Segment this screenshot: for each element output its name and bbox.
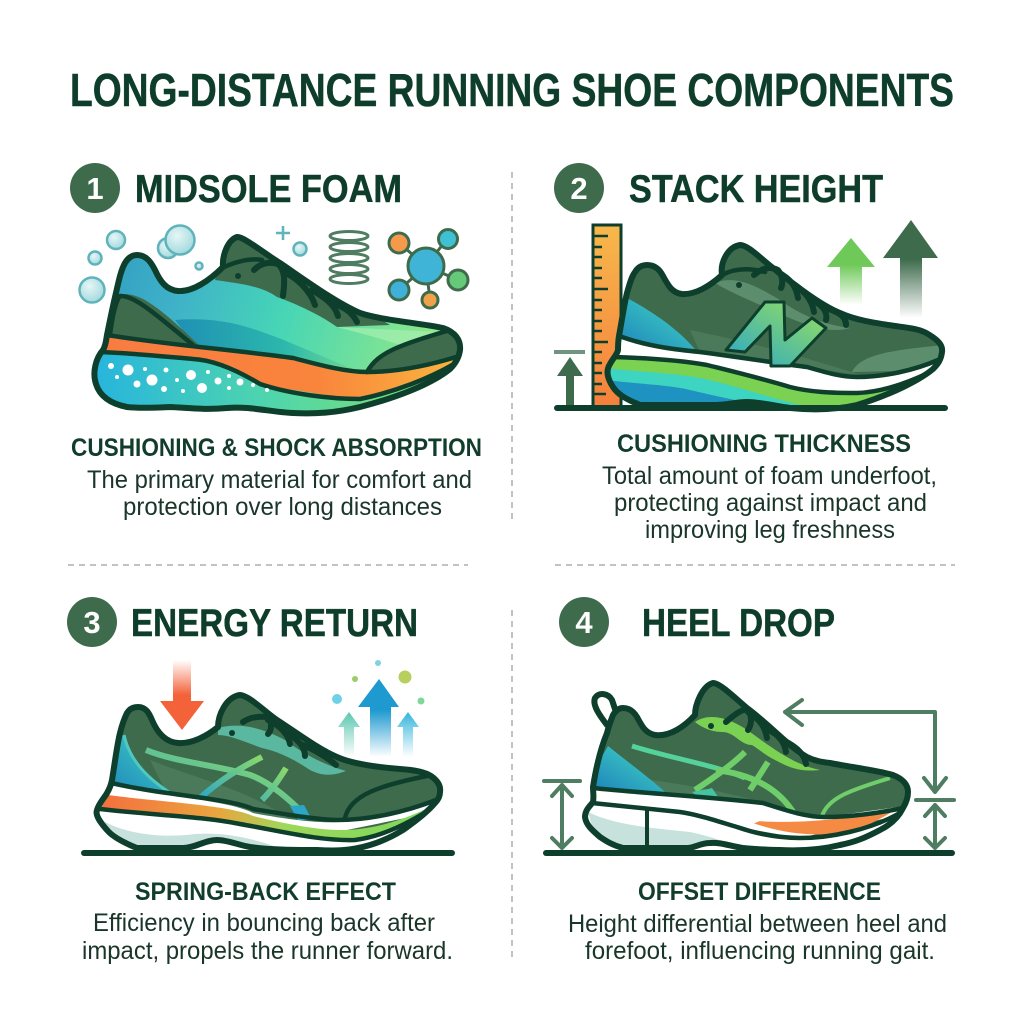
baseline bbox=[81, 850, 455, 856]
description: heel drop: Height differential between heel and bbox=[568, 910, 947, 938]
number badge 3 bbox=[67, 597, 117, 647]
logo: N mark bbox=[726, 302, 826, 366]
number badge 4: 4 bbox=[575, 605, 593, 640]
icon: small height arrow bbox=[554, 350, 585, 405]
icon: green up arrow bbox=[827, 238, 875, 305]
shoe: heel drop bbox=[580, 680, 915, 855]
shoe: stack height bbox=[600, 240, 950, 415]
number badge 3: 3 bbox=[83, 605, 101, 640]
shoe: midsole foam bbox=[90, 230, 470, 420]
description: stack height: protecting against impact and bbox=[614, 489, 927, 517]
subheading: offset difference: OFFSET DIFFERENCE bbox=[638, 878, 881, 906]
heading: stack height: STACK HEIGHT bbox=[629, 168, 883, 211]
description: heel drop bbox=[568, 910, 947, 965]
panel: stack height bbox=[554, 163, 950, 544]
description: midsole foam: The primary material for comfort and bbox=[87, 466, 472, 494]
subheading: spring-back effect: SPRING-BACK EFFECT bbox=[135, 878, 396, 906]
icon: drop arrow bbox=[785, 700, 946, 792]
heading: energy return: ENERGY RETURN bbox=[131, 602, 418, 645]
panel: energy return bbox=[67, 597, 455, 965]
icon: spring bbox=[330, 232, 368, 284]
heading: heel drop: HEEL DROP bbox=[642, 602, 835, 645]
description: energy return bbox=[82, 909, 453, 965]
description: energy return: impact, propels the runner forward. bbox=[82, 937, 453, 965]
description: stack height: improving leg freshness bbox=[645, 516, 895, 544]
heading: midsole foam: MIDSOLE FOAM bbox=[135, 168, 402, 211]
description: heel drop: forefoot, influencing running gait. bbox=[585, 937, 935, 965]
number badge 2: 2 bbox=[570, 171, 588, 206]
icon: impact arrow bbox=[160, 660, 204, 730]
subheading: cushioning thickness: CUSHIONING THICKNESS bbox=[617, 430, 911, 458]
baseline bbox=[554, 405, 948, 411]
panel: midsole foam bbox=[70, 163, 482, 521]
shoe: energy return bbox=[90, 690, 450, 860]
icon: forefoot height marker bbox=[916, 800, 954, 848]
icon: foam bubbles bbox=[80, 226, 306, 302]
number badge 1 bbox=[70, 163, 120, 213]
icon: heel height marker bbox=[544, 781, 580, 848]
description: stack height: Total amount of foam underfoot, bbox=[602, 462, 937, 490]
description: energy return: Efficiency in bouncing back after bbox=[93, 909, 435, 937]
number badge 4 bbox=[559, 597, 609, 647]
panel: heel drop bbox=[543, 597, 955, 965]
description: stack height bbox=[602, 462, 937, 544]
number badge 1: 1 bbox=[86, 171, 104, 206]
icon: rebound arrows bbox=[332, 660, 424, 757]
icon: ruler bbox=[593, 225, 621, 407]
icon: molecule bbox=[389, 230, 468, 308]
subheading: cushioning and shock absorption: CUSHIONING & SHOCK ABSORPTION bbox=[71, 434, 482, 462]
icon: dark up arrow bbox=[883, 220, 938, 318]
description: midsole foam bbox=[87, 466, 472, 521]
description: midsole foam: protection over long distances bbox=[123, 493, 442, 521]
baseline bbox=[543, 850, 955, 856]
number badge 2 bbox=[554, 163, 604, 213]
